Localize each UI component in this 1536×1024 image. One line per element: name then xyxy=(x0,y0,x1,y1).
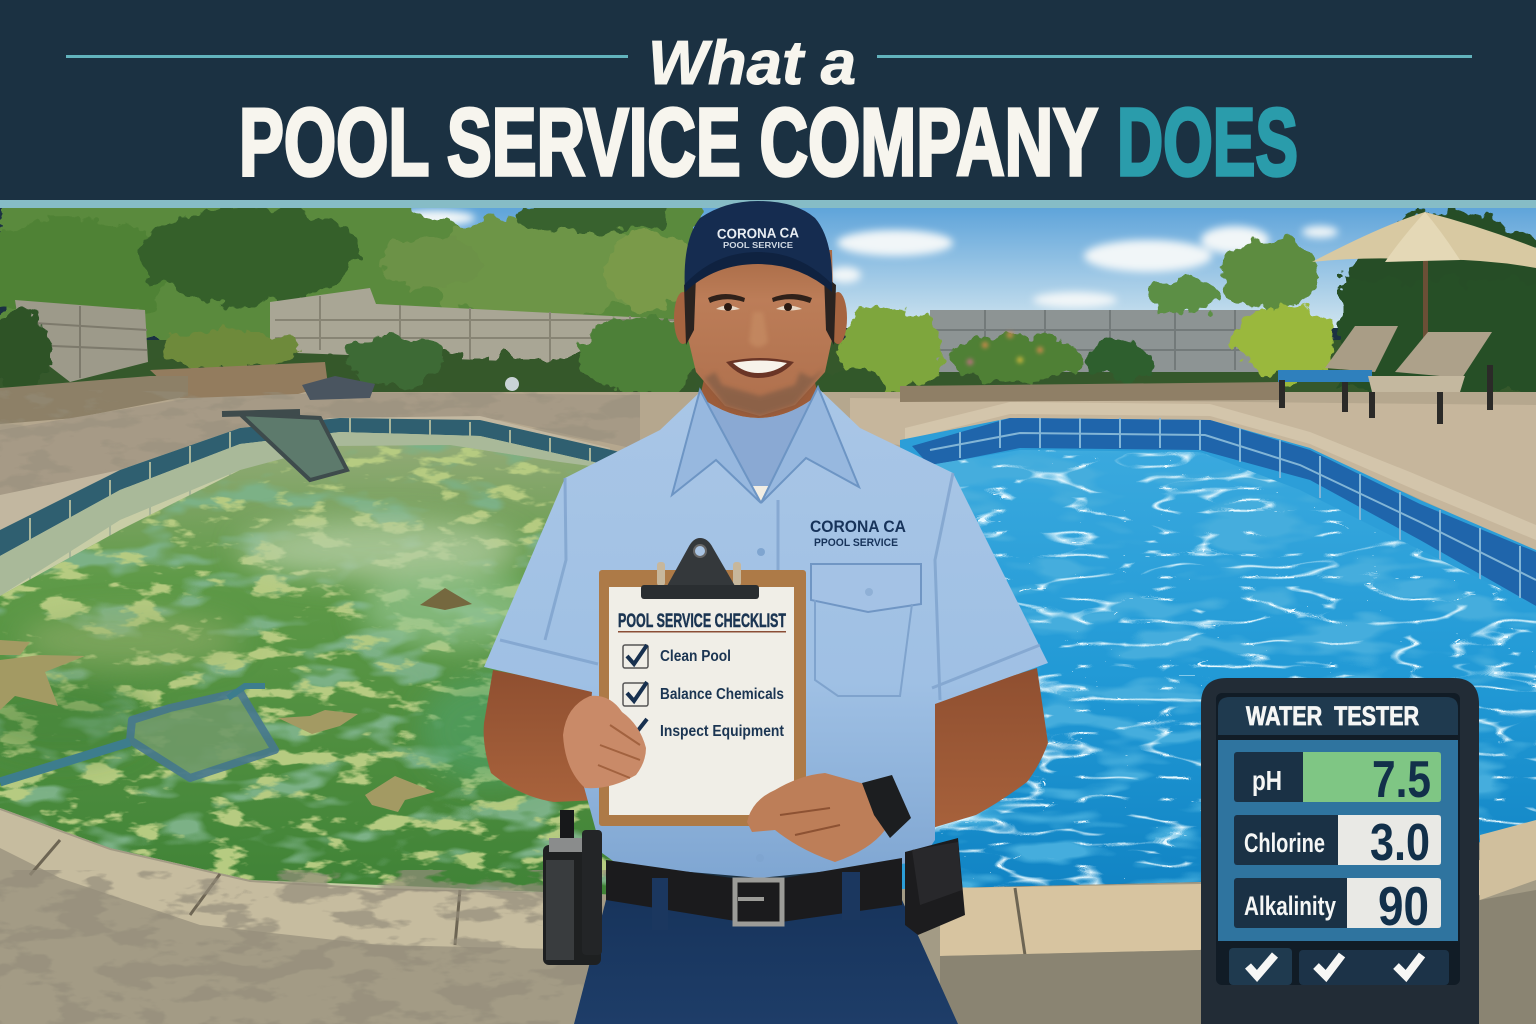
chlorine row: Chlorine xyxy=(1244,828,1325,858)
clipboard xyxy=(599,538,806,826)
service technician xyxy=(484,250,1048,1024)
embroidery xyxy=(810,517,906,549)
collar xyxy=(672,390,761,503)
smile xyxy=(726,358,794,378)
belt xyxy=(606,858,902,930)
paper xyxy=(609,587,794,815)
floating leaves xyxy=(0,588,472,812)
stone wall right xyxy=(930,310,1270,372)
embroidery: PPOOL SERVICE xyxy=(814,537,898,549)
clip xyxy=(641,538,759,599)
lounge chairs xyxy=(1278,326,1492,424)
lower deck and coping xyxy=(0,808,1536,1024)
alkalinity row: Alkalinity xyxy=(1244,891,1336,921)
checklist items xyxy=(623,645,785,740)
nose xyxy=(750,313,767,346)
checklist items: Balance Chemicals xyxy=(660,686,784,703)
brows and eyes xyxy=(708,294,745,303)
clean blue pool xyxy=(900,418,1536,890)
skimmer net in the water xyxy=(0,686,275,782)
technician cap xyxy=(685,201,832,292)
hedge behind the deck xyxy=(0,340,1520,392)
sky with clouds xyxy=(390,208,1536,328)
right hand holding clipboard xyxy=(747,773,885,862)
tester screen xyxy=(1216,693,1460,985)
raised planter left xyxy=(150,362,328,398)
pants xyxy=(574,900,958,1024)
checklist heading: POOL SERVICE CHECKLIST xyxy=(618,611,786,632)
shrubs and plants along the wall xyxy=(0,306,1155,403)
pH row xyxy=(1234,751,1441,809)
left arm xyxy=(484,670,600,802)
alkalinity row xyxy=(1234,875,1441,937)
water tester panel xyxy=(1201,678,1479,1024)
smart watch xyxy=(862,775,911,838)
right arm xyxy=(935,668,1048,828)
tester check buttons xyxy=(1229,948,1449,985)
pH row: pH xyxy=(1252,765,1282,796)
water tester panel: WATER TESTER xyxy=(1246,701,1419,731)
deck base xyxy=(0,392,1536,520)
alkalinity row: 90 xyxy=(1378,875,1429,937)
neck xyxy=(700,370,818,418)
chlorine row xyxy=(1234,814,1441,872)
pH row: 7.5 xyxy=(1372,751,1431,809)
head xyxy=(674,250,847,416)
shirt shading xyxy=(500,472,1040,700)
skimmer net on the deck edge xyxy=(222,412,347,480)
belt buckle xyxy=(735,880,782,924)
shirt buttons xyxy=(756,548,765,862)
tester heading xyxy=(1218,697,1458,735)
left hand holding clipboard xyxy=(563,696,646,788)
readout panel xyxy=(1218,740,1458,941)
title line one: What a xyxy=(648,29,856,98)
title line two: POOL SERVICE COMPANY xyxy=(239,89,1098,196)
trees left xyxy=(0,199,700,340)
trees right xyxy=(1149,212,1536,390)
chlorine row: 3.0 xyxy=(1370,814,1430,872)
tool holster left xyxy=(543,810,602,965)
chest pocket xyxy=(811,564,921,612)
blue work shirt xyxy=(484,388,1048,878)
embroidery: CORONA CA xyxy=(810,517,906,536)
umbrella xyxy=(1312,212,1536,338)
dirty green pool xyxy=(0,418,620,900)
collar interior xyxy=(700,395,818,503)
board xyxy=(599,570,806,826)
technician cap: CORONA CA xyxy=(717,224,799,242)
checklist items: Inspect Equipment xyxy=(660,723,785,740)
undershirt xyxy=(742,486,775,503)
tool pouch right xyxy=(905,838,965,935)
technician cap: POOL SERVICE xyxy=(723,241,794,250)
deck upper xyxy=(0,382,1536,552)
stone wall left xyxy=(15,288,690,382)
title accent word: DOES xyxy=(1117,89,1298,196)
debris on deck xyxy=(302,376,519,400)
title banner xyxy=(0,0,1536,208)
checklist items: Clean Pool xyxy=(660,648,731,665)
